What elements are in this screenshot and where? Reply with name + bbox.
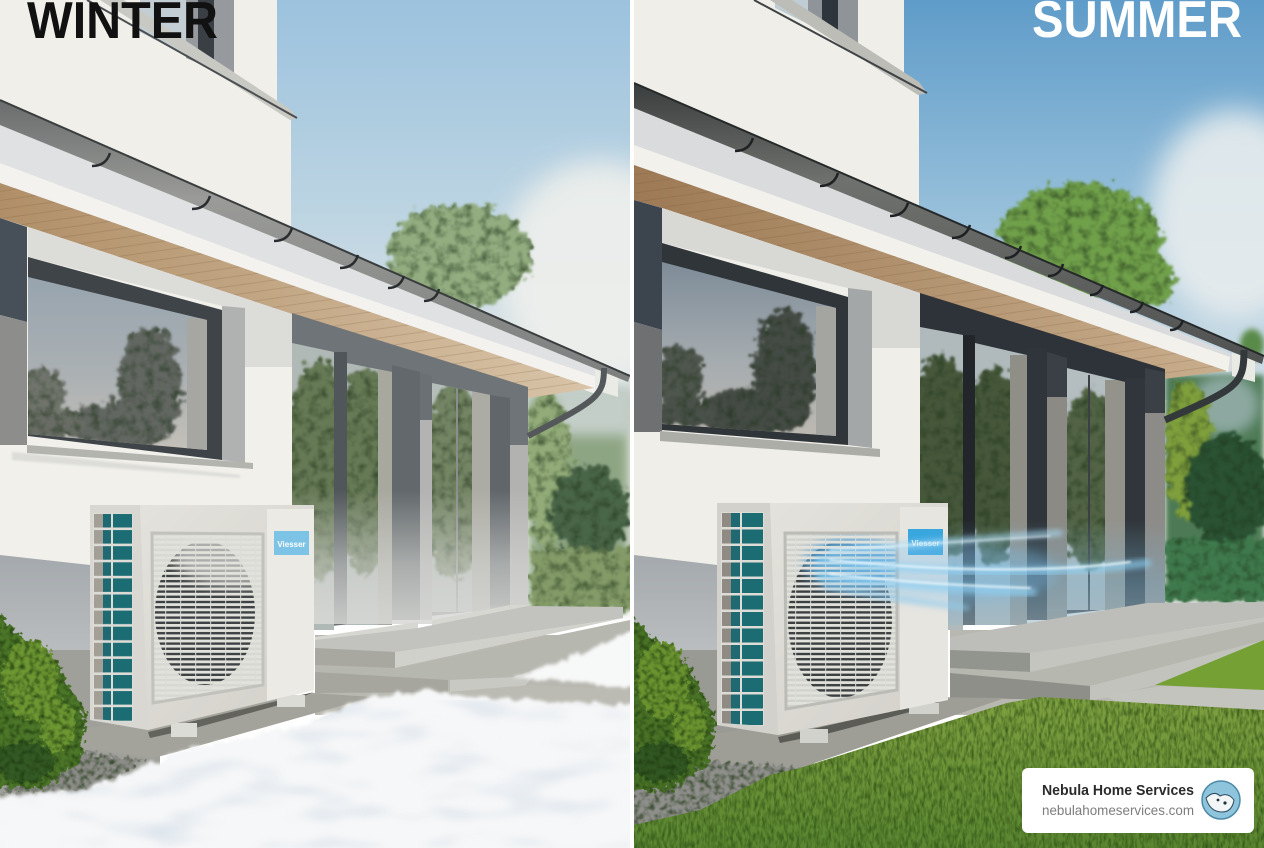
summer shrub <box>615 612 716 790</box>
winter window sill <box>12 445 253 478</box>
window tree reflection <box>14 318 207 452</box>
winter gutter <box>0 100 630 382</box>
summer wall shadow <box>634 555 717 685</box>
brand card <box>1022 768 1254 833</box>
summer background trees <box>998 182 1264 602</box>
grille and fan <box>783 530 900 712</box>
winter gravel <box>0 750 145 793</box>
unit feet <box>800 703 939 743</box>
grille frame <box>785 533 897 709</box>
winter wall shadow <box>0 555 90 650</box>
summer downspout <box>1165 350 1244 420</box>
summer gutter <box>634 83 1264 364</box>
brand url: nebulahomeservices.com <box>1042 803 1194 818</box>
window tree reflection <box>655 306 836 438</box>
summer window <box>655 243 872 448</box>
winter door thresholds <box>315 605 528 640</box>
unit body <box>717 503 948 735</box>
summer heat pump <box>717 503 948 743</box>
panel: winter <box>0 0 700 848</box>
side coil cells <box>721 512 764 726</box>
summer roof fascia <box>634 105 1258 372</box>
panel: summer <box>615 0 1264 848</box>
winter ground base <box>0 635 630 810</box>
summer window sill <box>660 431 880 457</box>
winter dark wall strip <box>0 218 27 445</box>
winter glass doors <box>284 313 528 630</box>
summer cloud <box>1150 110 1264 320</box>
summer wall reveal above window <box>662 208 920 348</box>
airflow streams <box>820 533 1147 608</box>
unit feet <box>171 695 305 737</box>
door tree reflections <box>906 355 1125 625</box>
summer eave end <box>1232 353 1255 382</box>
winter wood soffit <box>0 183 594 398</box>
brand badge <box>274 531 309 555</box>
summer upper ledge <box>754 0 927 95</box>
winter heat pump <box>90 505 314 738</box>
winter upper window <box>140 0 234 78</box>
summer steps <box>950 602 1264 711</box>
winter sky <box>270 0 630 420</box>
brand name: Nebula Home Services <box>1042 783 1194 799</box>
brand badge: Viesser <box>911 539 940 548</box>
unit shadow <box>148 692 314 738</box>
summer upper wall <box>634 0 919 215</box>
door tree reflections <box>284 360 490 630</box>
winter mist <box>292 490 528 624</box>
winter window <box>14 257 245 463</box>
summer lower wall <box>634 200 920 695</box>
winter wall reveal above window <box>28 227 292 367</box>
summer gravel <box>620 760 810 830</box>
grille and fan <box>154 535 262 700</box>
winter concrete pad <box>160 693 370 756</box>
summer glass doors <box>906 293 1165 630</box>
summer lawn <box>634 697 1264 848</box>
unit body <box>90 505 314 730</box>
door frames and pillars <box>334 352 347 594</box>
door frames and pillars <box>963 335 975 625</box>
winter lower wall <box>0 218 292 565</box>
summer wood soffit <box>634 165 1227 379</box>
winter eave end <box>595 370 618 397</box>
summer concrete pad <box>710 697 1005 768</box>
winter roof fascia <box>0 125 598 376</box>
winter background trees <box>388 203 635 610</box>
winter upper ledge <box>87 0 297 120</box>
winter upper wall <box>0 0 291 235</box>
winter cloud <box>498 147 630 374</box>
summer sky <box>900 0 1264 400</box>
unit shadow <box>778 698 948 743</box>
winter downspout <box>528 368 604 436</box>
winter snow <box>0 633 660 848</box>
brand badge: Viesser <box>277 540 306 549</box>
brand badge <box>908 529 943 555</box>
summer grass patch <box>1155 640 1264 690</box>
summer fascia lip <box>634 145 1230 372</box>
icon: logo badge <box>1202 781 1240 819</box>
summer upper window <box>775 0 858 48</box>
winter steps <box>315 606 630 693</box>
summer dark wall strip <box>634 200 662 432</box>
summer ground base <box>634 630 1264 830</box>
summer door tint <box>920 520 1165 625</box>
winter shrub <box>0 612 86 788</box>
winter fascia lip <box>0 163 600 394</box>
side coil cells <box>93 513 133 722</box>
grille frame <box>152 533 263 703</box>
